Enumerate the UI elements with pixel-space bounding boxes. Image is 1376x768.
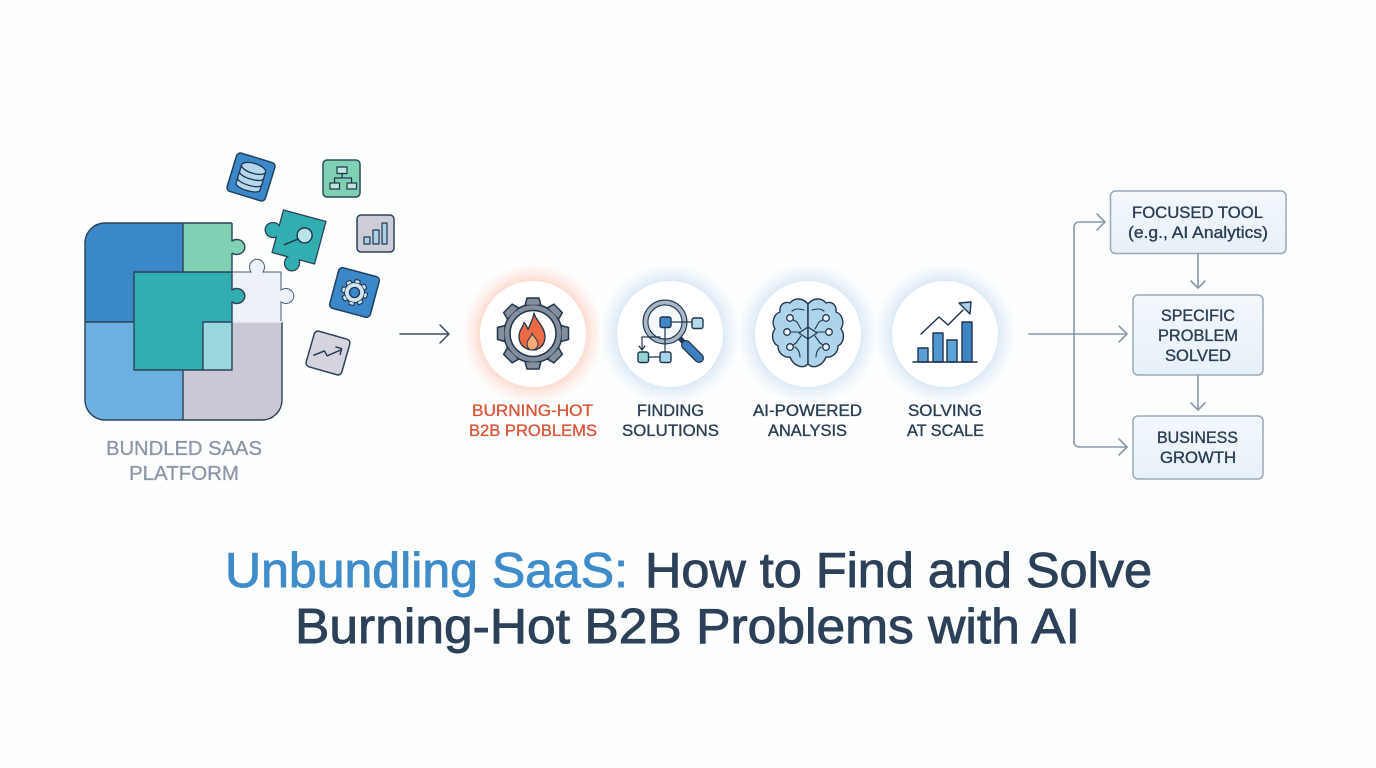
bundled SaaS puzzle platform bbox=[85, 223, 294, 420]
glow and circle bbox=[737, 263, 879, 405]
icon: rising bars bbox=[913, 302, 977, 362]
title: Burning-Hot B2B Problems with AI bbox=[295, 600, 1080, 654]
icon: bar chart tile bbox=[357, 215, 394, 252]
icon: trend line tile bbox=[305, 330, 351, 376]
label: FINDING bbox=[637, 402, 704, 420]
label: SOLUTIONS bbox=[622, 422, 719, 440]
icon: brain bbox=[773, 299, 843, 367]
label bbox=[622, 402, 719, 440]
step 4: solving at scale bbox=[874, 263, 1016, 440]
icon: magnifier over flow bbox=[638, 302, 703, 362]
title: How to Find and Solve bbox=[645, 544, 1152, 598]
step 3: AI-powered analysis bbox=[737, 263, 879, 440]
puzzle outlines bbox=[85, 223, 282, 420]
icon: gear tile bbox=[329, 267, 380, 318]
box: specific problem solved bbox=[1133, 295, 1263, 375]
connector: branching arrows bbox=[1029, 214, 1127, 455]
box: specific problem solved: PROBLEM bbox=[1158, 327, 1238, 345]
arrow: platform to steps bbox=[400, 325, 449, 343]
icon: database tile bbox=[226, 152, 276, 202]
box: focused tool: (e.g., AI Analytics) bbox=[1128, 224, 1268, 242]
arrow: problem to growth bbox=[1191, 375, 1205, 410]
puzzle tile: teal center bbox=[134, 272, 245, 370]
label: AT SCALE bbox=[907, 422, 984, 440]
label: bundled SaaS platform: PLATFORM bbox=[129, 463, 239, 485]
label: bundled SaaS platform bbox=[106, 438, 262, 485]
puzzle tile: green top-right bbox=[183, 223, 245, 272]
label: SOLVING bbox=[908, 402, 982, 420]
puzzle tile: light blue bottom-left bbox=[85, 322, 183, 420]
label: BURNING-HOT bbox=[472, 402, 593, 420]
label: bundled SaaS platform: BUNDLED SAAS bbox=[106, 438, 262, 460]
puzzle piece: magnifier bbox=[256, 207, 326, 276]
puzzle tile: light teal notch bbox=[203, 322, 232, 370]
label: ANALYSIS bbox=[768, 422, 847, 440]
label bbox=[469, 402, 597, 440]
box: focused tool bbox=[1110, 191, 1286, 254]
icon: hierarchy tile bbox=[323, 160, 360, 197]
label: B2B PROBLEMS bbox=[469, 422, 597, 440]
label: AI-POWERED bbox=[753, 402, 862, 420]
puzzle tile: white piece with tabs bbox=[232, 259, 294, 322]
glow and circle bbox=[599, 263, 741, 405]
puzzle tile: blue top-left bbox=[85, 223, 183, 322]
arrow: tool to problem bbox=[1191, 254, 1205, 288]
label bbox=[753, 402, 862, 440]
step 1: burning-hot problems bbox=[462, 263, 604, 440]
box: business growth bbox=[1133, 416, 1263, 479]
icon: gear with flame bbox=[498, 298, 568, 369]
box: business growth: BUSINESS bbox=[1157, 429, 1238, 447]
puzzle tile: gray bottom-right bbox=[183, 322, 282, 420]
glow and circle bbox=[462, 263, 604, 405]
title: Unbundling SaaS: bbox=[225, 544, 628, 598]
box: specific problem solved: SPECIFIC bbox=[1161, 307, 1235, 325]
box: focused tool: FOCUSED TOOL bbox=[1132, 204, 1263, 222]
glow and circle bbox=[874, 263, 1016, 405]
step 2: finding solutions bbox=[599, 263, 741, 440]
title bbox=[225, 544, 1152, 654]
box: business growth: GROWTH bbox=[1160, 449, 1236, 467]
box: specific problem solved: SOLVED bbox=[1165, 347, 1231, 365]
label bbox=[907, 402, 984, 440]
